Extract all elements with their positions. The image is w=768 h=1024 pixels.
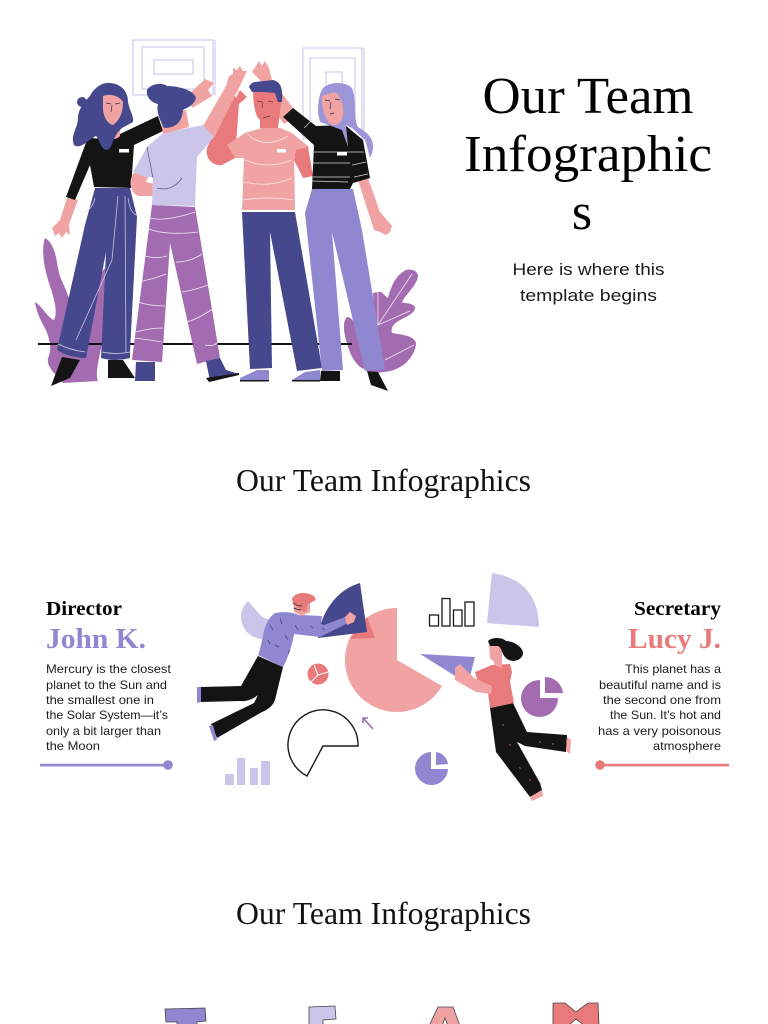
description: planet to the Sun and bbox=[46, 678, 167, 692]
main title: Our Team bbox=[482, 68, 694, 125]
lilac pie chart bbox=[415, 752, 448, 785]
description: only a bit larger than bbox=[46, 724, 161, 738]
big pink pie chart bbox=[345, 608, 442, 712]
purple pie chart bbox=[521, 677, 563, 717]
outline bar chart bbox=[430, 598, 474, 626]
name: John K. bbox=[46, 624, 146, 655]
small coral pie bbox=[308, 664, 328, 684]
letters cropped at page bottom bbox=[165, 1003, 599, 1024]
figure: floating woman bbox=[455, 638, 571, 801]
main title bbox=[464, 68, 712, 241]
figure: floating man bbox=[197, 593, 356, 741]
illustration: people with charts bbox=[197, 573, 571, 801]
subtitle: template begins bbox=[520, 286, 657, 305]
description: the second one from bbox=[603, 693, 721, 707]
divider with dot bbox=[595, 760, 729, 770]
main title: Infographic bbox=[464, 126, 712, 183]
shoes bbox=[135, 362, 155, 381]
name: Lucy J. bbox=[628, 624, 721, 655]
description: the smallest one in bbox=[46, 693, 154, 707]
navy wedge bbox=[318, 583, 367, 638]
divider with dot bbox=[40, 760, 173, 770]
plant right bbox=[344, 269, 418, 372]
section heading 1: Our Team Infographics bbox=[236, 462, 531, 498]
description: the Solar System—it’s bbox=[46, 708, 168, 722]
letter A bbox=[429, 1007, 460, 1024]
lilac wedge behind man bbox=[241, 601, 285, 639]
letter E bbox=[309, 1006, 336, 1024]
coral wedge shadow bbox=[350, 617, 375, 639]
purple triangle wedge bbox=[420, 654, 475, 684]
wall frame right bbox=[303, 48, 364, 140]
illustration: team high five bbox=[35, 40, 418, 391]
description: the Sun. It’s hot and bbox=[610, 708, 721, 722]
shoes bbox=[240, 370, 269, 380]
subtitle bbox=[512, 260, 664, 305]
description bbox=[598, 662, 721, 753]
lilac wedge top right bbox=[487, 573, 539, 627]
floor line bbox=[38, 343, 352, 345]
lilac bar chart bbox=[225, 758, 270, 785]
letter M bbox=[553, 1003, 599, 1024]
panel: secretary bbox=[595, 598, 729, 770]
panel: director bbox=[40, 598, 173, 770]
figure: woman in black striped shirt bbox=[283, 83, 392, 391]
subtitle: Here is where this bbox=[512, 260, 664, 279]
wall frame left bbox=[133, 40, 215, 95]
section heading 2: Our Team Infographics bbox=[236, 895, 531, 931]
description: has a very poisonous bbox=[598, 724, 721, 738]
main title: s bbox=[572, 184, 592, 241]
figure: woman in lilac top, seen from behind bbox=[131, 66, 247, 382]
role: Director bbox=[46, 598, 122, 620]
description: beautiful name and is bbox=[599, 678, 721, 692]
figure: woman in black top bbox=[51, 83, 163, 386]
role: Secretary bbox=[634, 598, 721, 620]
plant left bbox=[35, 238, 105, 383]
plant veins bbox=[378, 274, 414, 360]
description bbox=[46, 662, 172, 753]
small arrow bbox=[363, 718, 373, 729]
letter T bbox=[165, 1008, 206, 1024]
description: atmosphere bbox=[653, 739, 721, 753]
description: the Moon bbox=[46, 739, 100, 753]
figure: man's raised coral arm bbox=[207, 90, 247, 165]
description: Mercury is the closest bbox=[46, 662, 172, 676]
outline pie chart bbox=[288, 710, 358, 776]
figure: man in pink striped shirt bbox=[227, 61, 322, 382]
description: This planet has a bbox=[625, 662, 721, 676]
